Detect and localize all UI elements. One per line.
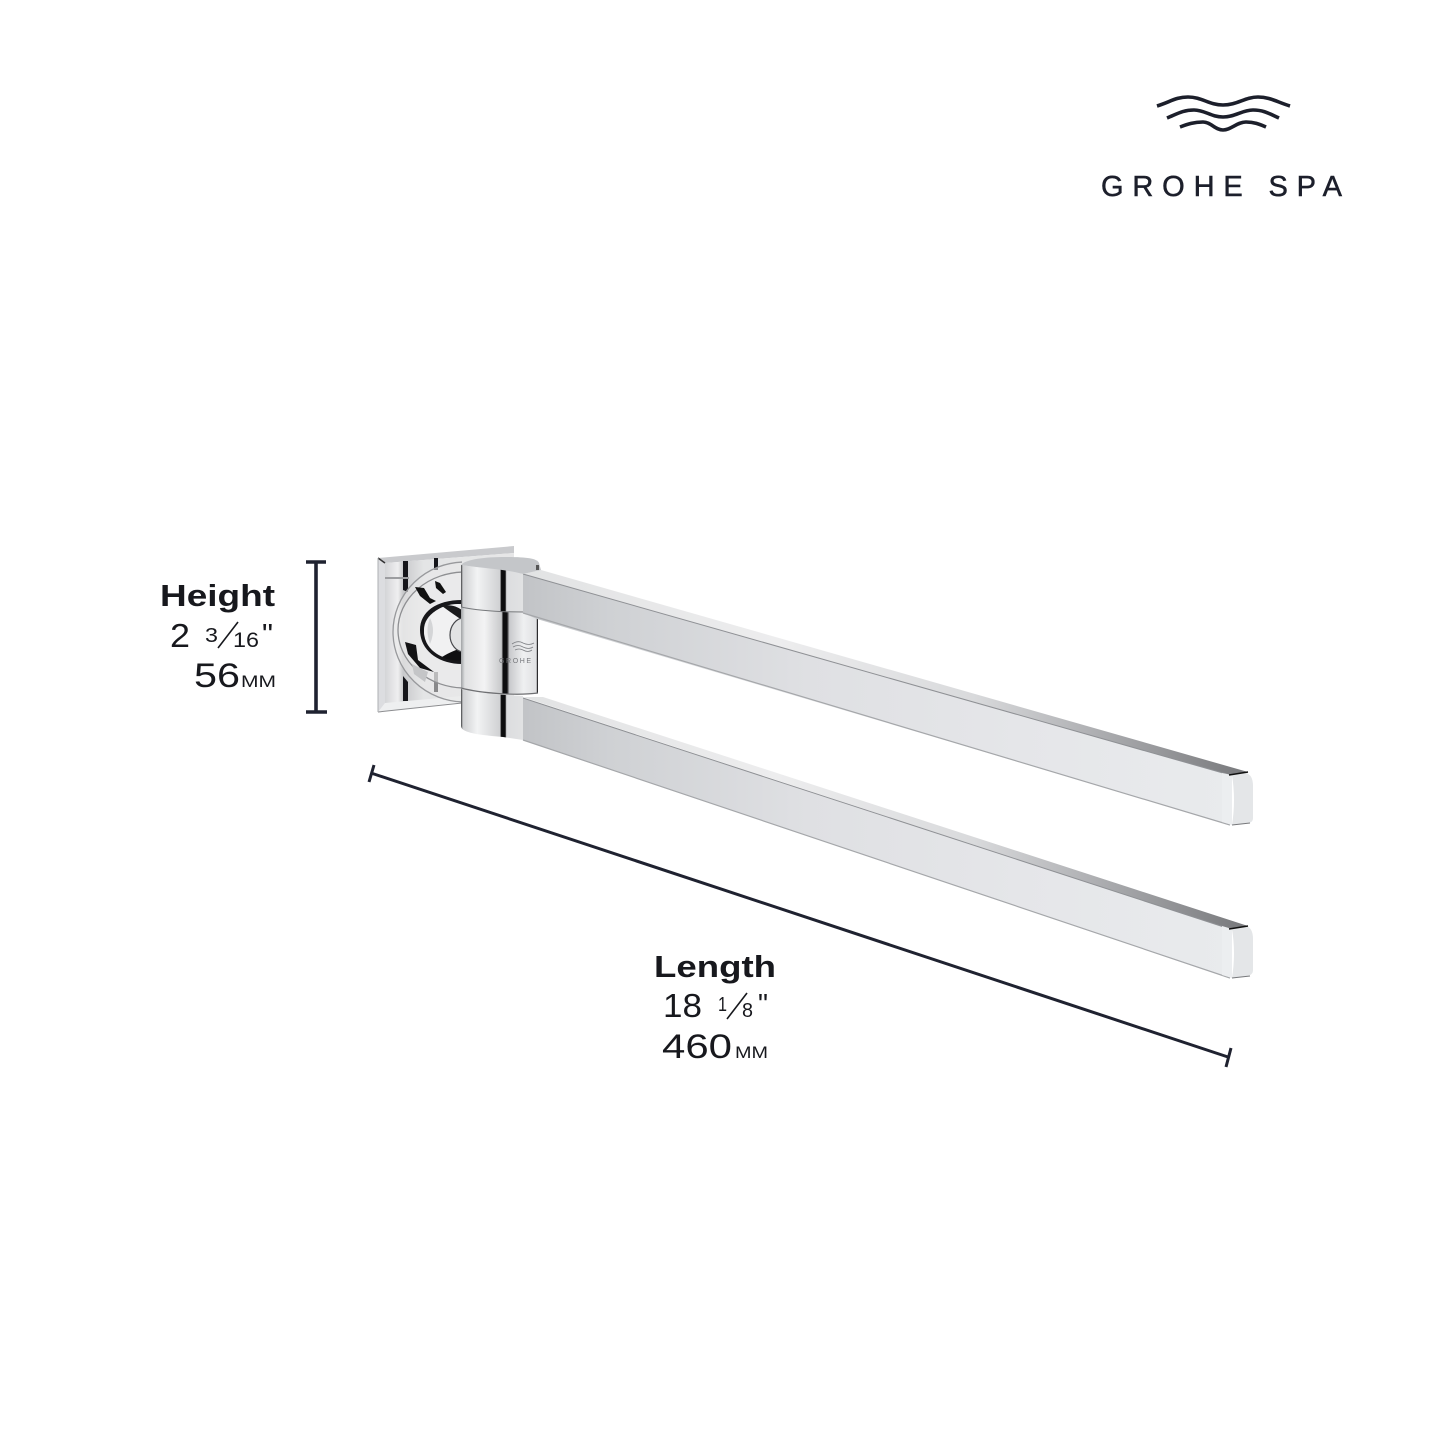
brand name: GROHE SPA <box>1101 171 1343 203</box>
height in inches: 16 <box>233 629 259 652</box>
icon: three waves <box>1157 97 1290 130</box>
height in inches <box>170 617 273 654</box>
length bracket <box>369 765 1231 1067</box>
upper arm <box>523 570 1248 825</box>
length heading: Length <box>654 949 776 984</box>
height heading: Height <box>160 578 275 613</box>
length in inches: 1 <box>718 994 727 1016</box>
brand logo <box>1101 97 1343 203</box>
engraved barrel logo <box>499 641 537 663</box>
height dimension label <box>160 578 276 695</box>
length dimension label <box>654 949 776 1066</box>
product: swivel towel bar <box>378 546 1253 978</box>
lower arm end cap <box>1222 926 1253 978</box>
height in millimetres <box>194 657 276 695</box>
height bracket <box>306 562 327 712</box>
length in millimetres <box>662 1028 768 1066</box>
lower arm <box>523 697 1248 978</box>
length in millimetres: 460 <box>662 1028 732 1066</box>
length in inches: " <box>758 989 768 1021</box>
engraved barrel logo: GROHE SPA <box>499 658 555 665</box>
height in inches: " <box>262 619 273 651</box>
swivel barrel top and bottom sections <box>461 557 541 740</box>
upper arm end cap <box>1222 772 1253 825</box>
length in inches <box>663 987 768 1024</box>
wall plate <box>378 546 514 712</box>
height in millimetres: 56 <box>194 657 240 695</box>
barrel middle section <box>461 607 538 694</box>
infographic canvas <box>162 95 1342 1068</box>
height in millimetres: MM <box>241 672 276 691</box>
height in inches: 2 <box>170 617 190 654</box>
length in inches: 18 <box>663 987 702 1024</box>
length in millimetres: MM <box>735 1043 768 1062</box>
length in inches: 8 <box>742 1000 753 1022</box>
height in inches: 3 <box>205 625 218 647</box>
rosette <box>392 561 462 702</box>
